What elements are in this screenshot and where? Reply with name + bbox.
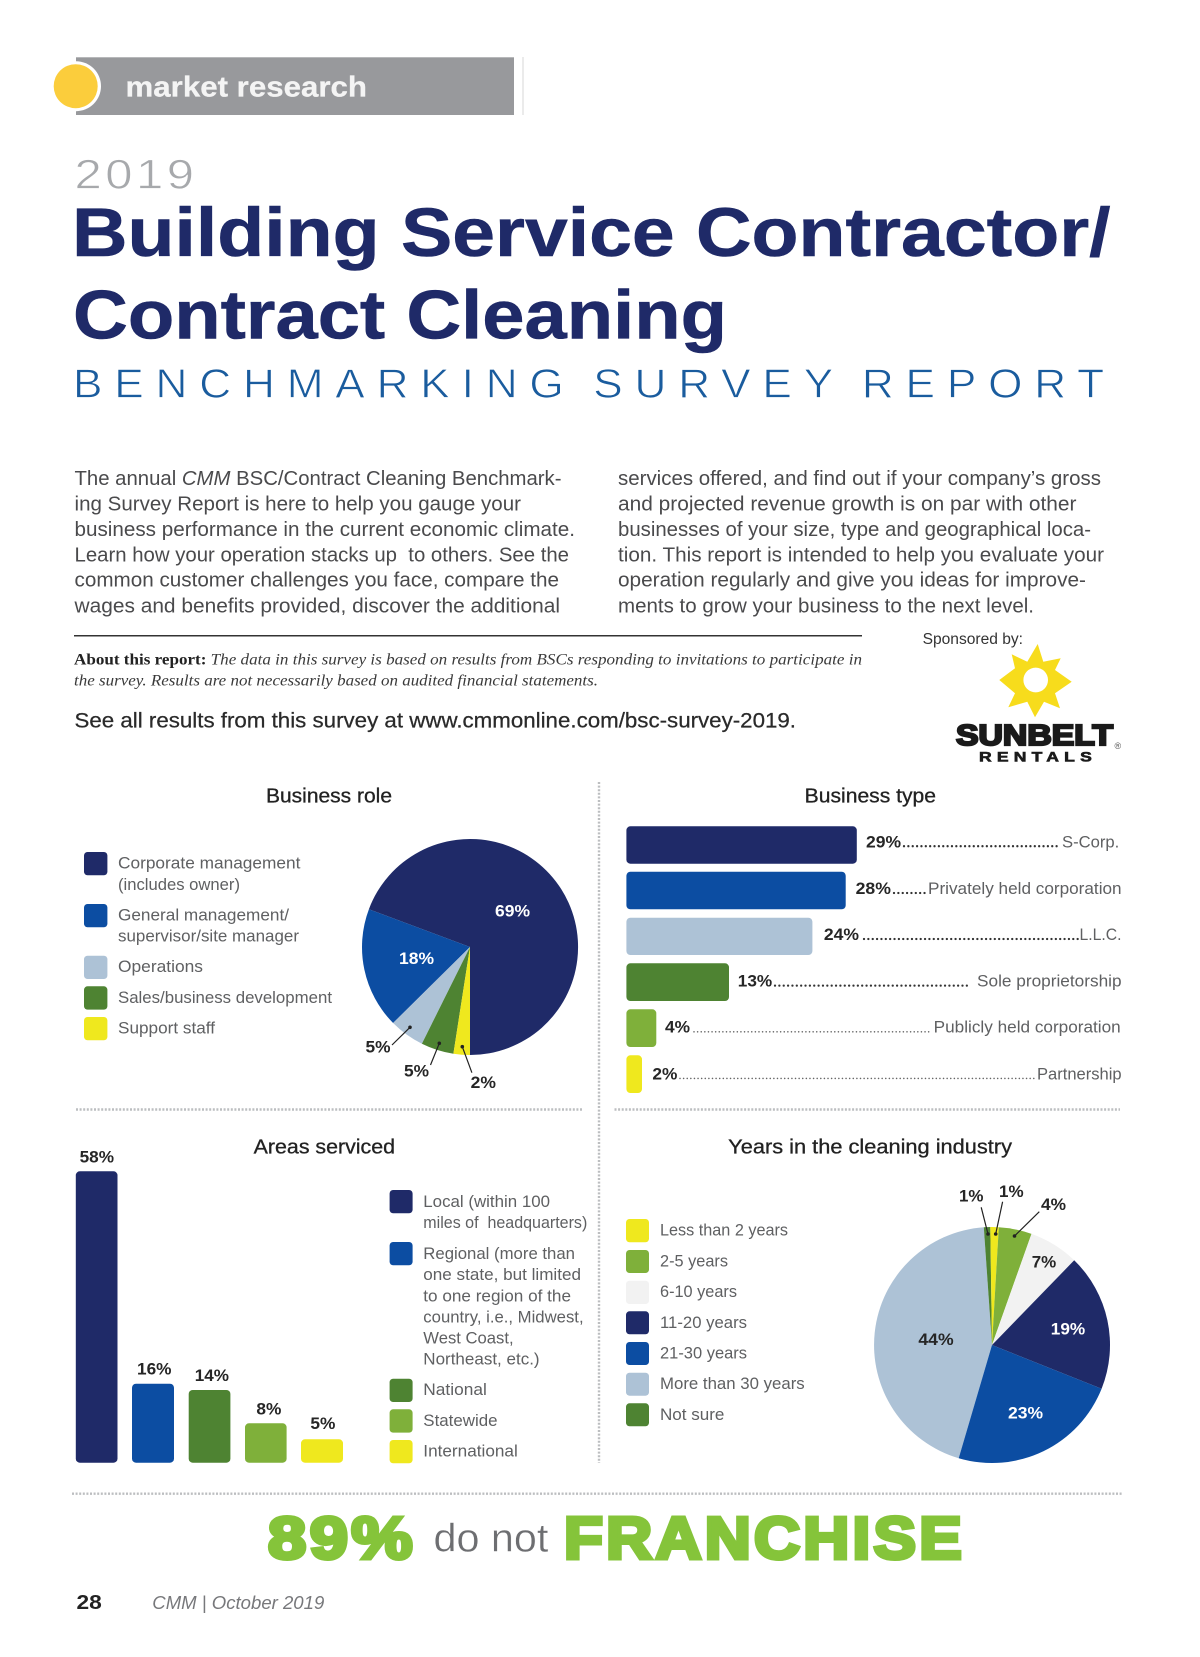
about this report note: the survey. Results are not necessarily based on audited financial statements. — [74, 673, 598, 690]
legend: areas serviced: Statewide — [423, 1411, 498, 1430]
legend: business role: General management/ — [118, 905, 289, 924]
legend: areas serviced: one state, but limited — [423, 1265, 581, 1284]
pie chart: years in the industry: 4% — [1041, 1195, 1066, 1214]
pie chart: years in the industry — [874, 1182, 1110, 1463]
legend: areas serviced: Local (within 100 — [423, 1192, 550, 1211]
bar chart: business type: S-Corp. — [1062, 832, 1119, 851]
intro text: right column: tion. This report is intended to help you evaluate your — [618, 544, 1104, 567]
callout: 89% do not franchise: 89% — [268, 1506, 416, 1572]
pie chart: business role: 69% — [495, 902, 530, 921]
legend: business role — [84, 852, 332, 1040]
pie chart: business role: 18% — [399, 949, 434, 968]
intro text: right column: services offered, and find out if your company’s gross — [618, 467, 1101, 490]
legend: business role: Corporate management — [118, 854, 301, 873]
legend: areas serviced — [390, 1190, 587, 1463]
sponsor logo: Sunbelt Rentals — [923, 631, 1122, 765]
pie chart: years in the industry: 19% — [1051, 1319, 1085, 1338]
intro text: right column: and projected revenue growth is on par with other — [618, 493, 1077, 516]
title block — [72, 151, 1116, 406]
intro text: left column: business performance in the current economic climate. — [74, 518, 575, 541]
bar chart: business type: Privately held corporation — [928, 879, 1122, 898]
legend: years in the industry: 11-20 years — [660, 1313, 747, 1332]
intro text: right column: operation regularly and give you ideas for improve- — [618, 569, 1086, 592]
intro text: left column: wages and benefits provided, discover the additional — [73, 594, 560, 617]
legend: years in the industry — [626, 1219, 805, 1426]
pie chart: years in the industry: 23% — [1008, 1404, 1043, 1423]
legend: business role: supervisor/site manager — [118, 927, 299, 946]
legend: years in the industry: Not sure — [660, 1405, 724, 1424]
about this report note — [74, 651, 862, 690]
legend: areas serviced: West Coast, — [423, 1328, 514, 1347]
pie chart: business role: 2% — [471, 1073, 496, 1092]
panel: years in the cleaning industry — [626, 1136, 1110, 1463]
sponsor logo: Sunbelt Rentals: Sponsored by: — [923, 631, 1023, 648]
bar chart: business type: 28% — [856, 879, 891, 898]
intro text: left column: The annual CMM BSC/Contract Cleaning Benchmark- — [74, 467, 562, 490]
bar chart: areas serviced: 8% — [256, 1399, 281, 1418]
title block: BENCHMARKING SURVEY REPORT — [73, 360, 1116, 406]
legend: areas serviced: International — [423, 1442, 518, 1461]
intro text: left column — [73, 467, 575, 617]
title block: 2019 — [74, 151, 198, 198]
about this report note: About this report: The data in this survey is based on results from BSCs responding to invitations to participate in — [74, 651, 862, 668]
intro text: right column: ments to grow your business to the next level. — [618, 594, 1034, 617]
bar chart: areas serviced: 16% — [137, 1360, 172, 1379]
legend: years in the industry: Less than 2 years — [660, 1220, 788, 1239]
legend: business role: Sales/business development — [118, 988, 332, 1007]
callout: 89% do not franchise — [268, 1506, 965, 1572]
pie chart: years in the industry: 7% — [1032, 1252, 1056, 1271]
title block: Contract Cleaning — [73, 276, 727, 353]
bar chart: business type: Publicly held corporation — [934, 1018, 1121, 1037]
intro text: left column: common customer challenges you face, compare the — [74, 569, 559, 592]
pie chart: years in the industry: 1% — [999, 1182, 1024, 1201]
legend: areas serviced: Northeast, etc.) — [423, 1349, 540, 1368]
panel: areas serviced — [76, 1136, 587, 1463]
legend: areas serviced: miles of headquarters) — [423, 1213, 587, 1232]
callout: 89% do not franchise: FRANCHISE — [564, 1506, 965, 1572]
panel: business role — [84, 785, 578, 1092]
pie chart: business role: 5% — [366, 1038, 390, 1057]
sponsor logo: Sunbelt Rentals: ® — [1114, 741, 1122, 751]
panel: business type — [626, 785, 1122, 1093]
legend: business role: Operations — [118, 957, 203, 976]
panel: business role: Business role — [266, 785, 392, 807]
bar chart: areas serviced: 5% — [310, 1414, 335, 1433]
pie chart: business role — [362, 839, 578, 1092]
intro text: right column: businesses of your size, type and geographical loca- — [618, 518, 1091, 541]
bar chart: business type: 29% — [866, 832, 901, 851]
pie chart: years in the industry: 44% — [918, 1330, 954, 1349]
pie chart: years in the industry: 1% — [959, 1186, 984, 1206]
section tab: market research: market research — [126, 72, 367, 104]
bar chart: business type: L.L.C. — [1080, 925, 1122, 944]
survey link: See all results from this survey at www.cmmonline.com/bsc-survey-2019. — [74, 709, 796, 732]
bar chart: business type: 13% — [738, 972, 772, 991]
legend: years in the industry: More than 30 years — [660, 1374, 805, 1393]
sponsor logo: Sunbelt Rentals: RENTALS — [979, 750, 1097, 765]
bar chart: areas serviced: 58% — [80, 1148, 114, 1167]
sponsor logo: Sunbelt Rentals: SUNBELT — [956, 720, 1113, 752]
intro text: left column: ing Survey Report is here to help you gauge your — [74, 493, 521, 516]
footer: page number and issue: CMM | October 2019 — [152, 1593, 324, 1613]
legend: years in the industry: 2-5 years — [660, 1251, 728, 1270]
legend: areas serviced: to one region of the — [423, 1286, 571, 1305]
pie chart: business role: 5% — [404, 1062, 429, 1080]
bar chart: business type: 4% — [665, 1018, 690, 1037]
bar chart: areas serviced: 14% — [195, 1366, 229, 1385]
bar chart: areas serviced — [76, 1148, 343, 1463]
bar chart: business type: Sole proprietorship — [977, 972, 1122, 991]
panel: areas serviced: Areas serviced — [254, 1136, 395, 1158]
footer: page number and issue — [76, 1592, 324, 1614]
footer: page number and issue: 28 — [76, 1592, 102, 1614]
legend: areas serviced: Regional (more than — [423, 1244, 575, 1263]
section tab: market research — [51, 57, 523, 115]
bar chart: business type: 2% — [652, 1064, 677, 1083]
intro text: left column: Learn how your operation stacks up to others. See the — [74, 544, 569, 567]
bar chart: business type: Partnership — [1037, 1064, 1122, 1083]
legend: business role: (includes owner) — [118, 875, 240, 894]
title block: Building Service Contractor/ — [72, 194, 1110, 271]
bar chart: business type: 24% — [824, 925, 859, 944]
callout: 89% do not franchise: do not — [434, 1517, 548, 1561]
bar chart: business type — [626, 826, 1122, 1093]
panel: business type: Business type — [805, 785, 936, 807]
legend: years in the industry: 21-30 years — [660, 1344, 747, 1363]
legend: business role: Support staff — [118, 1019, 215, 1038]
legend: years in the industry: 6-10 years — [660, 1282, 737, 1301]
intro text: right column — [618, 467, 1104, 617]
legend: areas serviced: National — [423, 1380, 487, 1399]
panel: years in the cleaning industry: Years in the cleaning industry — [728, 1136, 1012, 1158]
legend: areas serviced: country, i.e., Midwest, — [423, 1308, 584, 1327]
